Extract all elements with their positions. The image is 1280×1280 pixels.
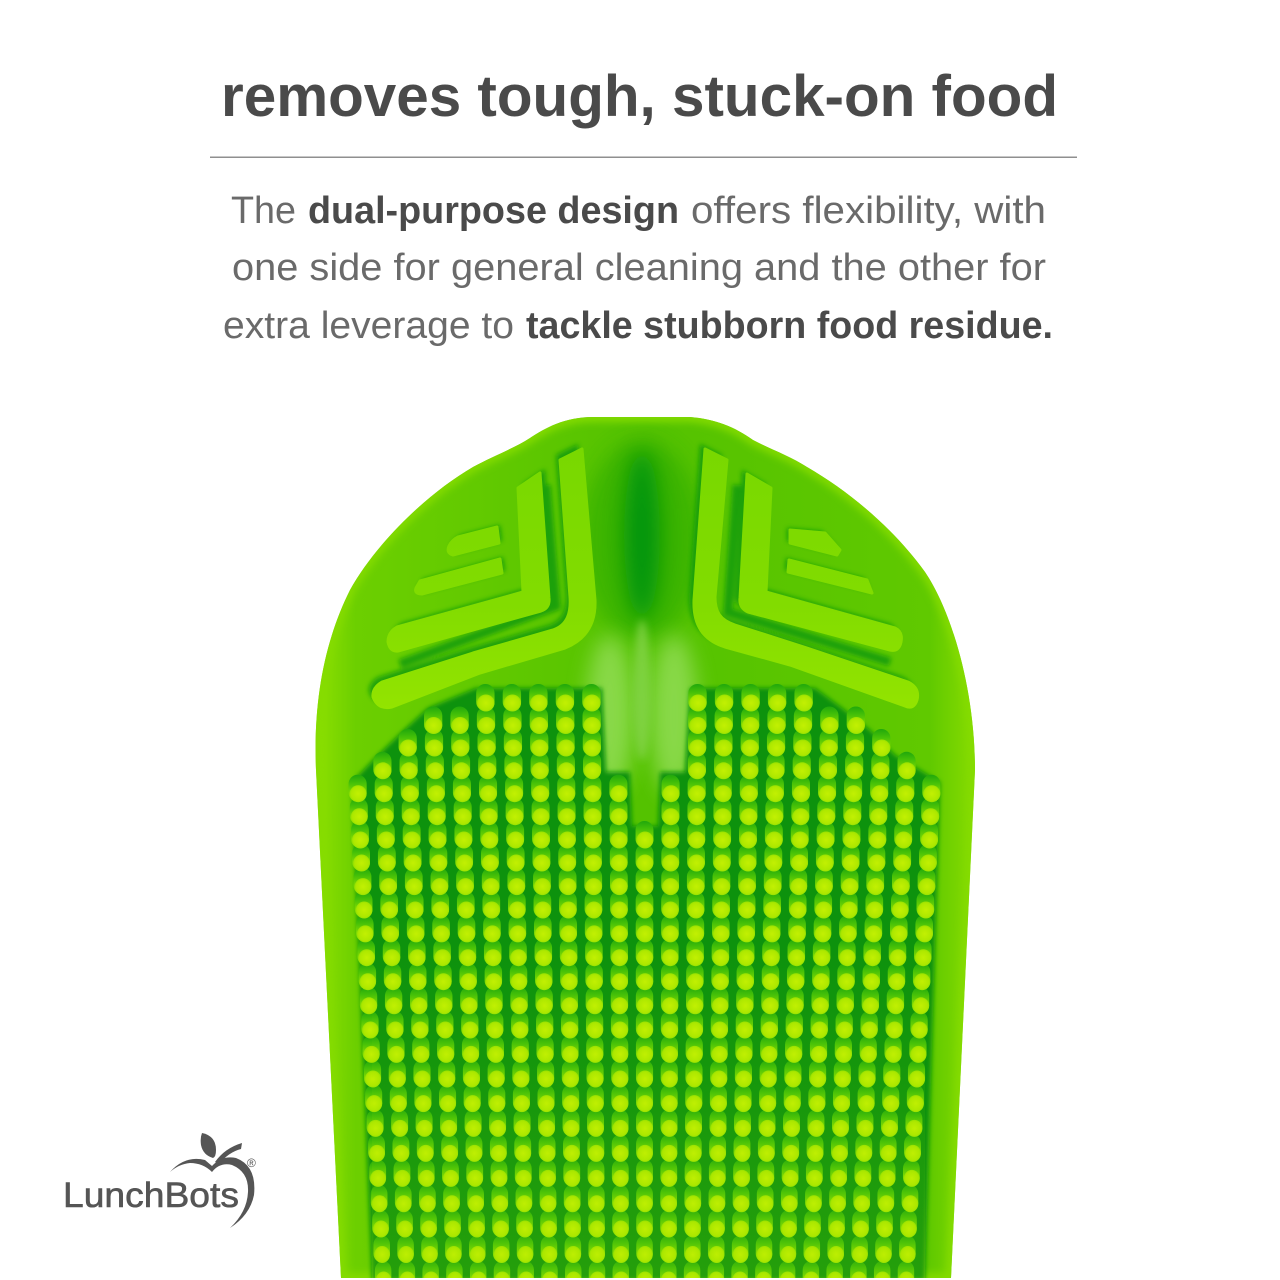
divider rule bbox=[210, 156, 1077, 158]
description text: tackle stubborn food residue. bbox=[526, 305, 1053, 347]
raised chevron ridges bbox=[373, 449, 918, 708]
logo stem bbox=[215, 1143, 242, 1164]
scrubber body bbox=[300, 400, 990, 1280]
lower bristle lightening bbox=[372, 1064, 925, 1278]
bristle grid bbox=[349, 684, 940, 1280]
logo: LunchBots bbox=[63, 1133, 256, 1228]
central channel shading bbox=[582, 440, 702, 795]
dark bristle bed bbox=[352, 688, 940, 1280]
groove shadows bbox=[369, 444, 913, 703]
description text: The bbox=[231, 190, 296, 232]
description text: extra leverage to bbox=[223, 305, 514, 347]
lighter top lip and rim bbox=[316, 417, 975, 1278]
description text: one side for general cleaning and the other for bbox=[232, 247, 1046, 289]
description text: offers flexibility, with bbox=[691, 190, 1046, 232]
registered mark: ® bbox=[247, 1156, 256, 1170]
logo leaf bbox=[201, 1133, 216, 1158]
logo wordmark: LunchBots bbox=[63, 1176, 239, 1215]
product: green silicone scrubber bbox=[300, 400, 990, 1280]
description text bbox=[223, 190, 1053, 347]
title: removes tough, stuck-on food bbox=[221, 64, 1058, 129]
description text: dual-purpose design bbox=[308, 190, 679, 232]
logo apple outline bbox=[170, 1157, 254, 1228]
